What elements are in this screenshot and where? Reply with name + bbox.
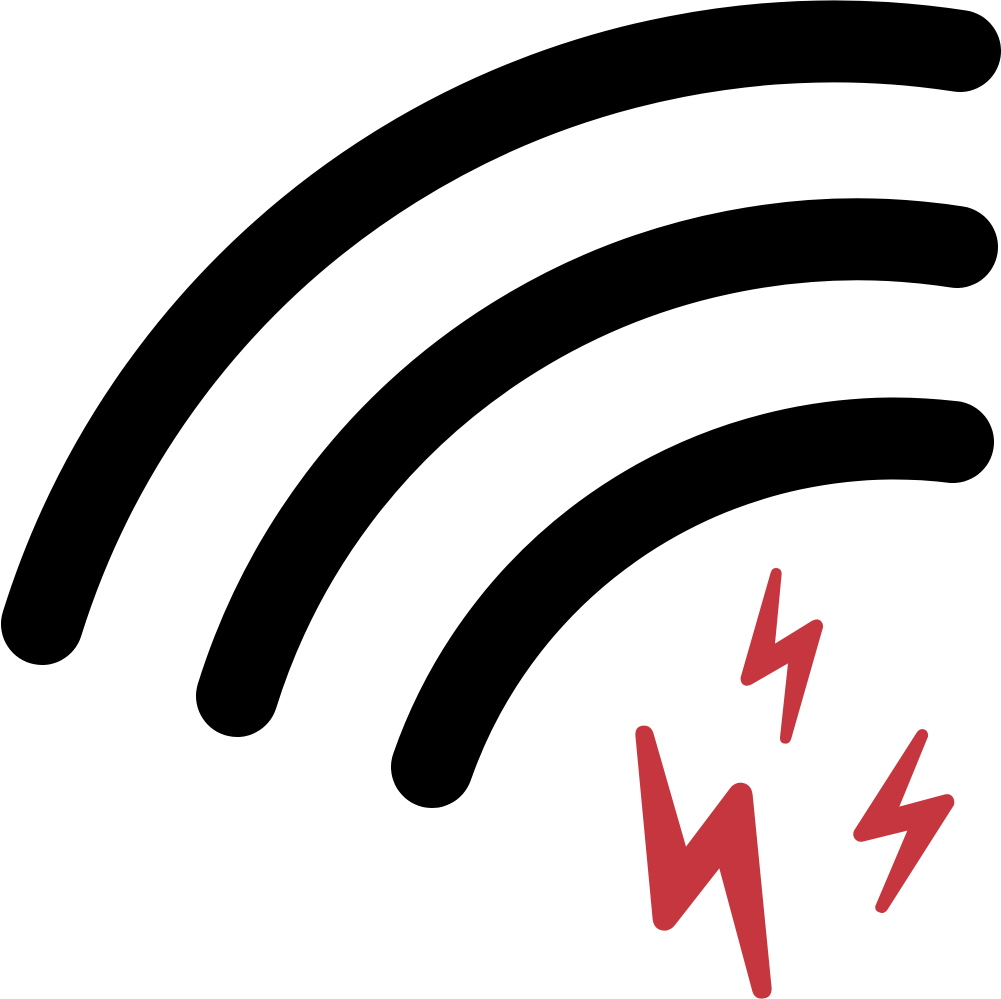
large lightning bolt <box>635 726 772 999</box>
right lightning bolt <box>853 729 954 913</box>
inner signal arc <box>432 439 953 767</box>
middle signal arc <box>237 239 957 696</box>
outer signal arc <box>42 41 960 624</box>
lightning bolts <box>635 568 954 999</box>
top lightning bolt <box>741 568 823 744</box>
